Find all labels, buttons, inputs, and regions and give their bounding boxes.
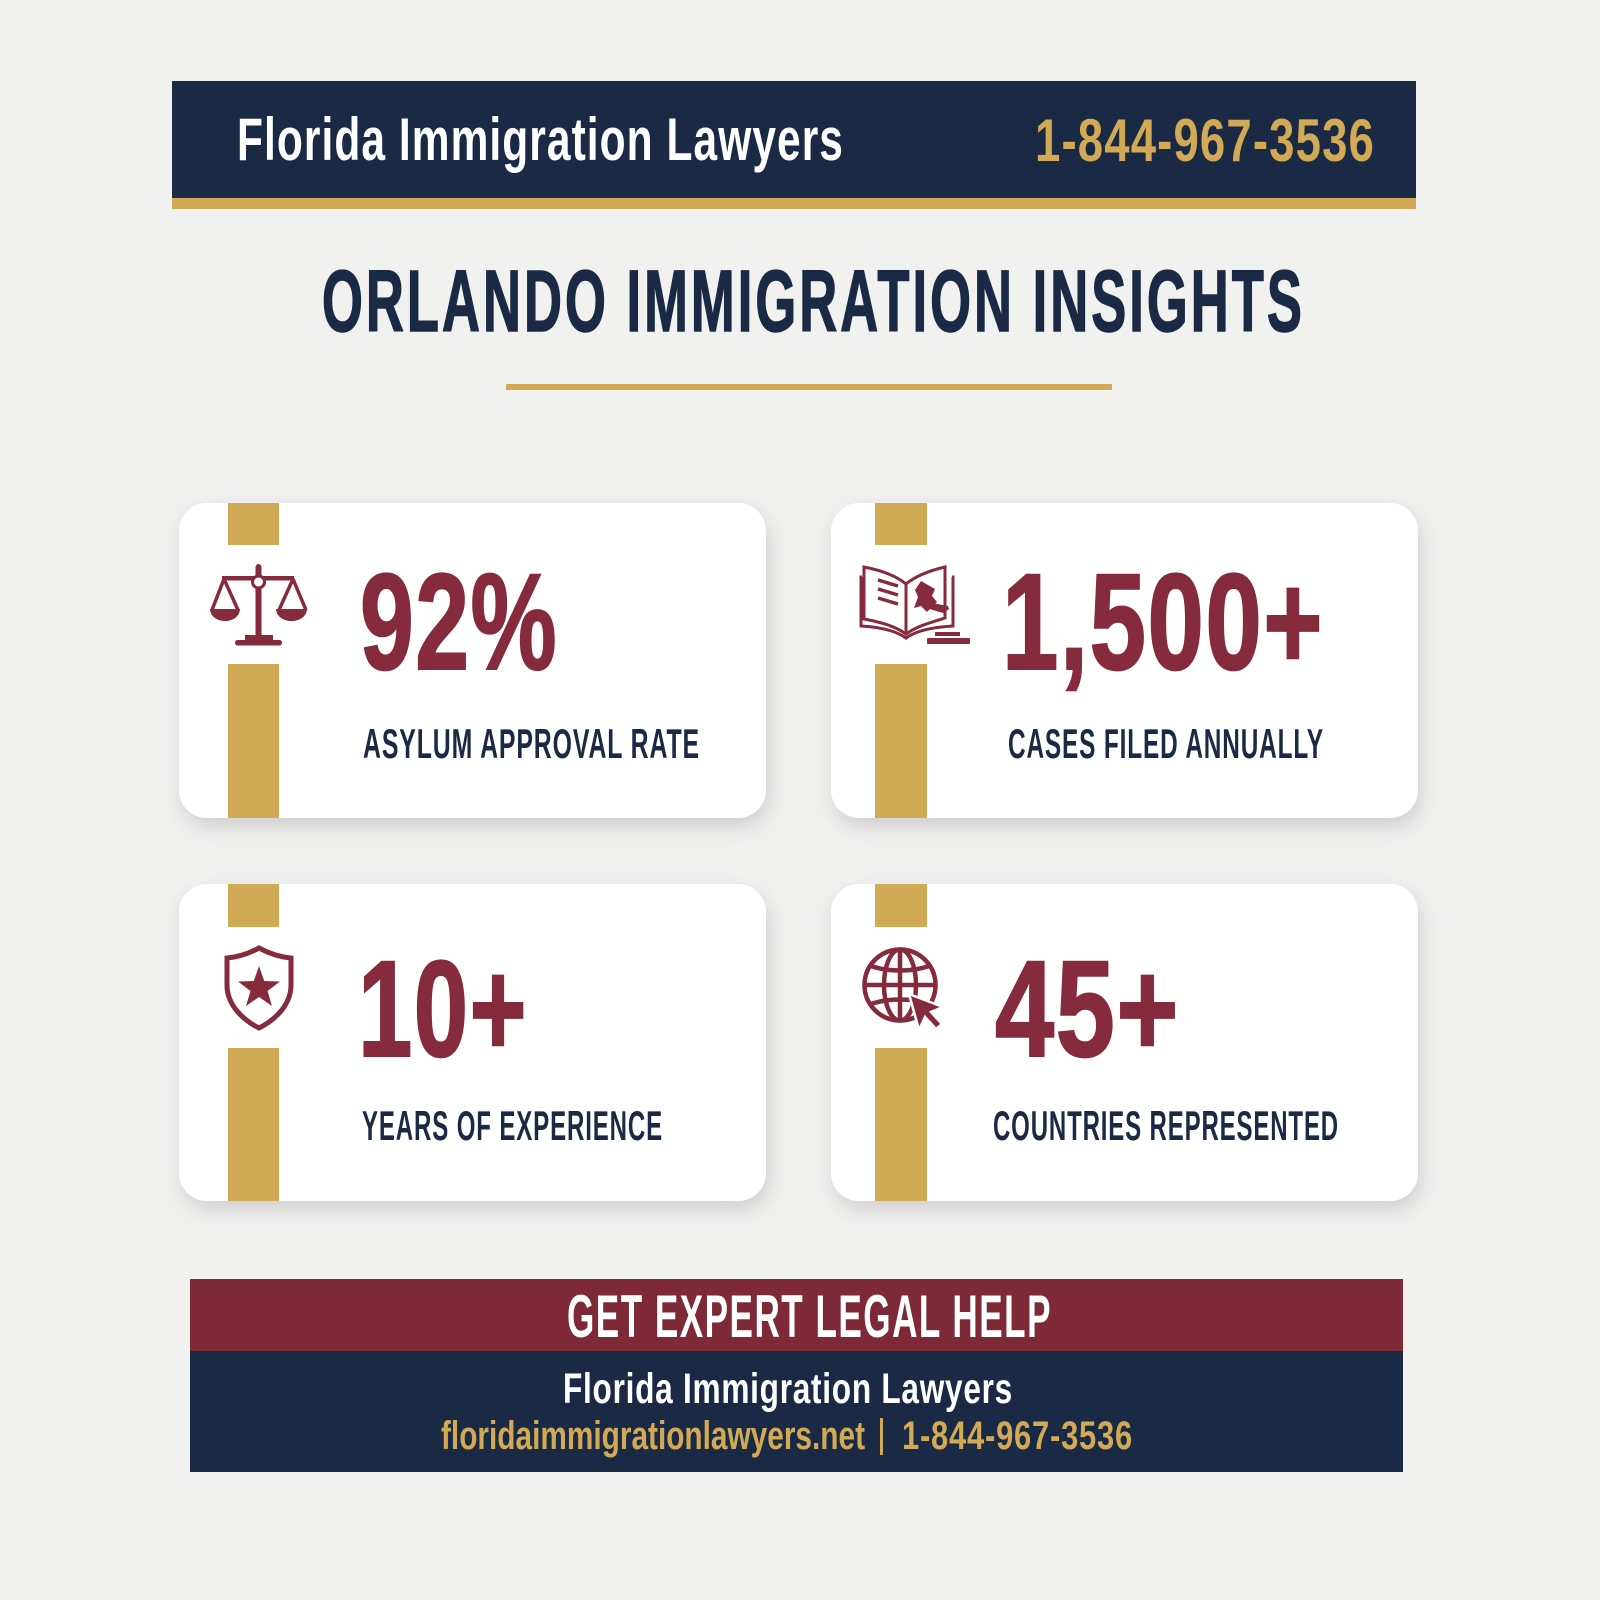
label: cases filed annually: CASES FILED ANNUALLY bbox=[1008, 720, 1324, 767]
statistic: 10+: 10+ bbox=[358, 933, 528, 1086]
label: years of experience: YEARS OF EXPERIENCE bbox=[362, 1102, 663, 1149]
icon: globe with cursor bbox=[864, 950, 943, 1030]
label: countries represented: COUNTRIES REPRESENTED bbox=[993, 1102, 1339, 1149]
footer contact line: floridaimmigrationlawyers.net bbox=[441, 1414, 865, 1458]
icon: law book and gavel bbox=[861, 567, 970, 644]
icon: scales of justice bbox=[210, 564, 307, 646]
icon: shield with star bbox=[227, 948, 291, 1028]
label: asylum approval rate: ASYLUM APPROVAL RATE bbox=[363, 720, 700, 767]
panel: years of experience bbox=[179, 884, 766, 1201]
panel: countries represented bbox=[831, 884, 1418, 1201]
footer firm name: Florida Immigration Lawyers bbox=[563, 1365, 1013, 1413]
phone number: 1-844-967-3536 bbox=[1035, 107, 1375, 174]
statistic: 45+: 45+ bbox=[995, 933, 1180, 1086]
call to action heading: GET EXPERT LEGAL HELP bbox=[567, 1283, 1052, 1350]
footer contact line: 1-844-967-3536 bbox=[902, 1414, 1133, 1458]
panel: asylum approval rate bbox=[179, 503, 766, 818]
panel: cases filed annually bbox=[831, 503, 1418, 818]
statistic: 92%: 92% bbox=[360, 546, 558, 699]
header banner bbox=[172, 81, 1416, 209]
statistic: 1,500+: 1,500+ bbox=[1002, 546, 1324, 699]
firm name: Florida Immigration Lawyers bbox=[237, 106, 844, 173]
title underline bbox=[506, 384, 1112, 390]
footer call to action bbox=[190, 1279, 1403, 1472]
